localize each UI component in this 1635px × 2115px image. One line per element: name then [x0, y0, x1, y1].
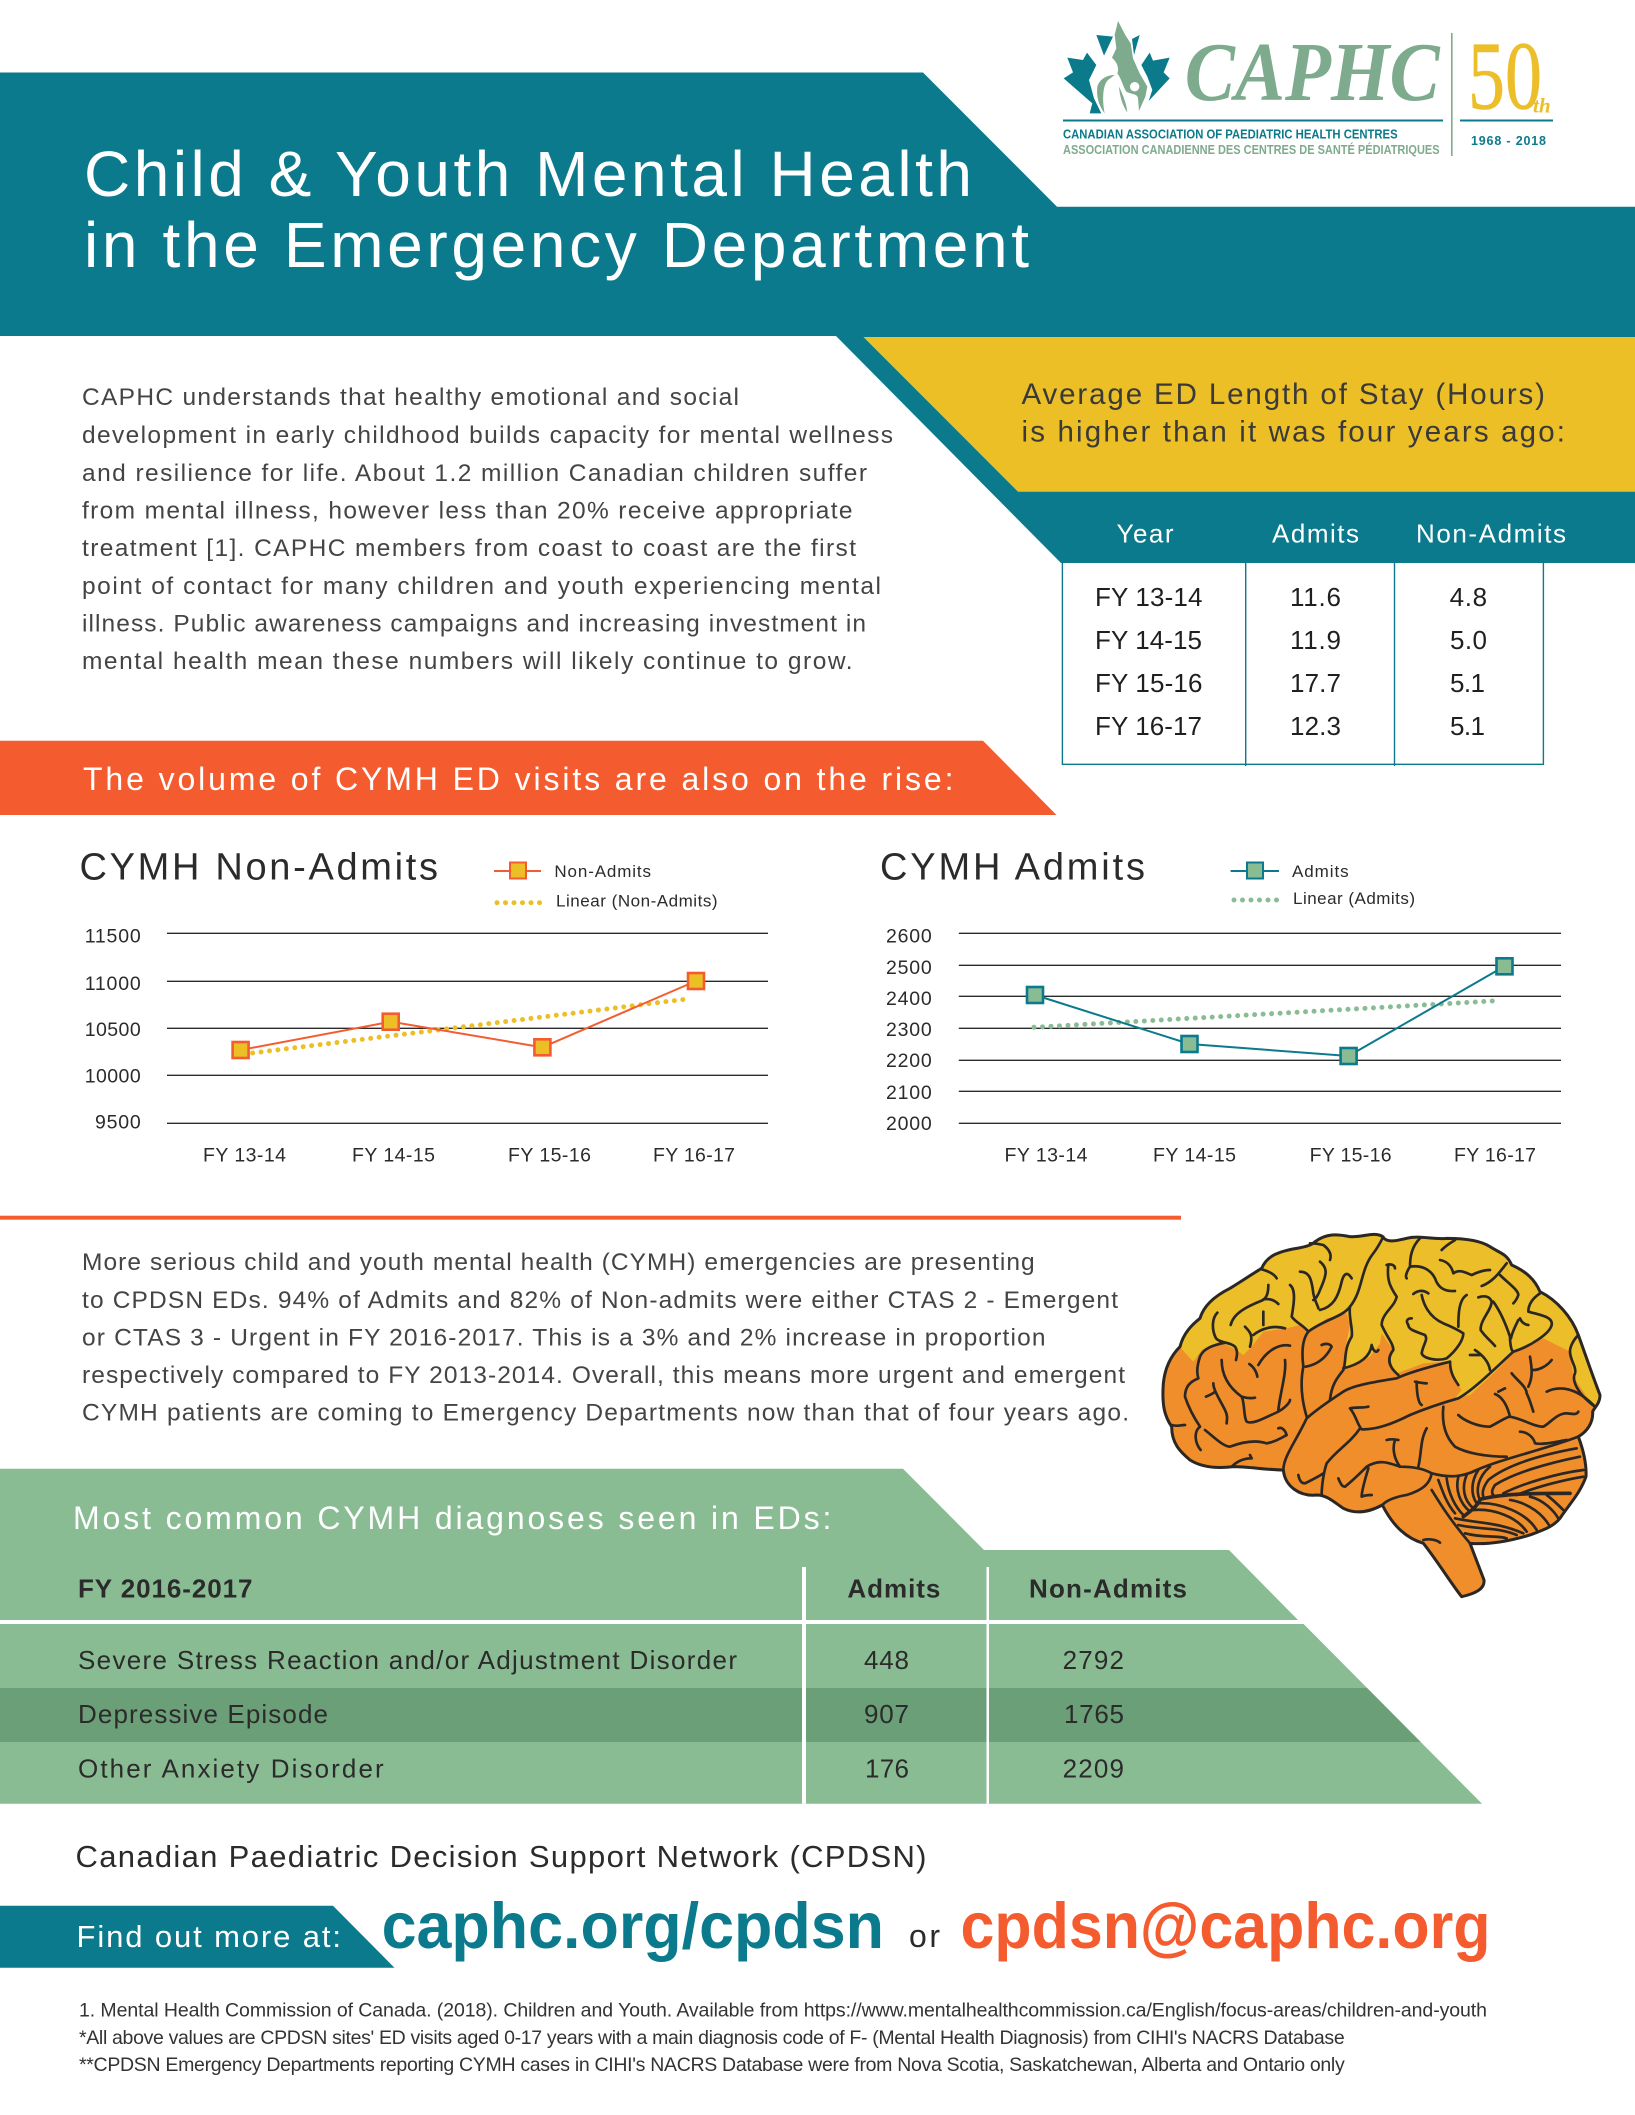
row: other anxiety: Other Anxiety Disorder	[78, 1754, 384, 1784]
panel: most common diagnoses	[0, 1469, 1482, 1804]
y axis labels: 10500	[85, 1019, 141, 1041]
icon: maple leaf with figures	[1064, 21, 1170, 113]
y axis labels: 2100	[886, 1082, 932, 1104]
x axis labels: FY 16-17	[653, 1145, 735, 1167]
title: Child & Youth Mental Health	[84, 138, 972, 210]
logo: CAPHC 50th: th	[1533, 94, 1551, 118]
table body: 11.9	[1290, 625, 1341, 655]
paragraph: serious emergencies: CYMH patients are coming to Emergency Departments now than that of four years ago.	[82, 1400, 1129, 1426]
table header	[1116, 519, 1566, 549]
chart: CYMH Admits	[880, 846, 1561, 1167]
legend: Non-Admits	[554, 862, 651, 881]
row: severe stress: 448	[864, 1645, 909, 1675]
trend line	[253, 999, 685, 1053]
table body: 5.1	[1450, 711, 1485, 741]
table header: FY 2016-2017	[78, 1574, 252, 1604]
intro paragraph: from mental illness, however less than 20% receive appropriate	[82, 498, 853, 524]
x axis labels: FY 14-15	[352, 1145, 435, 1167]
y axis labels: 2600	[886, 926, 932, 948]
table header: Year	[1116, 519, 1174, 549]
table body: 4.8	[1450, 582, 1487, 612]
x axis labels	[1004, 1145, 1536, 1167]
x axis labels: FY 13-14	[203, 1145, 286, 1167]
legend: Admits	[1292, 862, 1349, 881]
wordmark: CAPHC	[1185, 26, 1441, 119]
table body: 12.3	[1290, 711, 1341, 741]
title: in the Emergency Department	[84, 209, 1029, 281]
y axis labels: 11000	[85, 973, 141, 995]
50th: 50	[1468, 22, 1542, 130]
footnotes	[79, 2000, 1487, 2076]
footnotes: **CPDSN Emergency Departments reporting CYMH cases in CIHI's NACRS Database were from Nova Scotia, Saskatchewan, Alberta and Ontario only	[79, 2054, 1345, 2076]
chart: CYMH Non-Admits	[80, 846, 768, 1167]
intro paragraph: point of contact for many children and youth experiencing mental	[82, 573, 881, 600]
x axis labels: FY 14-15	[1153, 1145, 1236, 1167]
table header: Admits	[1272, 519, 1359, 549]
chart title: CYMH Non-Admits	[80, 846, 438, 888]
orange banner: volume rising: The volume of CYMH ED visits are also on the rise:	[83, 761, 954, 797]
paragraph: serious emergencies	[82, 1249, 1129, 1426]
row: other anxiety	[78, 1754, 1124, 1784]
x axis labels: FY 15-16	[508, 1145, 591, 1167]
intro paragraph: and resilience for life. About 1.2 million Canadian children suffer	[82, 460, 867, 487]
row: depressive episode: 1765	[1064, 1699, 1124, 1729]
y axis labels: 9500	[95, 1112, 141, 1134]
logo: CAPHC 50th	[1063, 21, 1553, 157]
icon: brain	[1163, 1223, 1613, 1597]
intro paragraph: illness. Public awareness campaigns and increasing investment in	[82, 611, 866, 638]
paragraph: serious emergencies: to CPDSN EDs. 94% of Admits and 82% of Non-admits were either CTAS 2 - Emergent	[82, 1287, 1118, 1314]
row: depressive episode	[78, 1699, 1124, 1729]
data series	[233, 973, 704, 1058]
paragraph: serious emergencies: or CTAS 3 - Urgent in FY 2016-2017. This is a 3% and 2% increase in proportion	[82, 1324, 1046, 1352]
table body: 5.1	[1450, 668, 1485, 698]
find out more flag	[0, 1906, 394, 1968]
table body: 17.7	[1290, 668, 1341, 698]
legend	[494, 862, 718, 911]
intro paragraph: CAPHC understands that healthy emotional and social	[82, 384, 739, 411]
legend	[1231, 862, 1415, 908]
table body: FY 15-16	[1095, 668, 1202, 698]
legend: Linear (Admits)	[1293, 889, 1415, 908]
English name: CANADIAN ASSOCIATION OF PAEDIATRIC HEALTH CENTRES	[1063, 126, 1398, 141]
network name: Canadian Paediatric Decision Support Network (CPDSN)	[76, 1839, 926, 1874]
panel: average ED length of stay	[836, 336, 1635, 766]
row: other anxiety: 2209	[1063, 1754, 1124, 1784]
table header: Non-Admits	[1416, 519, 1566, 549]
row: other anxiety: 176	[865, 1754, 909, 1784]
header banner	[0, 72, 1635, 336]
text: or: or	[909, 1918, 940, 1954]
table body: 11.6	[1290, 582, 1341, 612]
y axis labels: 2200	[886, 1050, 932, 1072]
table body: FY 14-15	[1095, 625, 1202, 655]
intro paragraph	[82, 384, 893, 675]
data series	[1027, 958, 1512, 1064]
years: 1968 - 2018	[1471, 134, 1546, 148]
panel heading: Average ED Length of Stay (Hours)	[1022, 378, 1545, 411]
intro paragraph: development in early childhood builds capacity for mental wellness	[82, 422, 893, 449]
y axis labels: 2000	[886, 1113, 932, 1135]
y axis labels	[85, 926, 141, 1134]
table header: Non-Admits	[1029, 1574, 1187, 1604]
footnotes: *All above values are CPDSN sites' ED visits aged 0-17 years with a main diagnosis code of F- (Mental Health Diagnosis) from CIHI's NACRS Database	[79, 2027, 1345, 2049]
panel heading	[1022, 378, 1565, 449]
French name: ASSOCIATION CANADIENNE DES CENTRES DE SANTÉ PÉDIATRIQUES	[1063, 142, 1440, 157]
table body	[1062, 563, 1543, 766]
y axis labels: 11500	[85, 926, 141, 948]
paragraph: serious emergencies: respectively compared to FY 2013-2014. Overall, this means more urgent and emergent	[82, 1362, 1125, 1389]
find out more flag: Find out more at:	[76, 1919, 341, 1954]
row: depressive episode: Depressive Episode	[78, 1699, 328, 1729]
table body: FY 13-14	[1095, 582, 1202, 612]
paragraph: serious emergencies: More serious child and youth mental health (CYMH) emergencies are presenting	[82, 1249, 1035, 1276]
x axis labels: FY 13-14	[1004, 1145, 1088, 1167]
row: severe stress: Severe Stress Reaction and/or Adjustment Disorder	[78, 1645, 737, 1675]
intro paragraph: treatment [1]. CAPHC members from coast to coast are the first	[82, 535, 856, 562]
y axis labels: 2300	[886, 1019, 932, 1041]
x axis labels	[203, 1145, 735, 1167]
y axis labels: 10000	[85, 1066, 141, 1088]
y axis labels: 2400	[886, 988, 932, 1010]
row: severe stress: 2792	[1063, 1645, 1124, 1675]
chart title: CYMH Admits	[880, 846, 1145, 888]
table body: 5.0	[1450, 625, 1487, 655]
row: depressive episode: 907	[864, 1699, 909, 1729]
table body: FY 16-17	[1095, 711, 1202, 741]
orange banner: volume rising	[0, 741, 1056, 815]
legend: Linear (Non-Admits)	[556, 892, 718, 911]
y axis labels: 2500	[886, 957, 932, 979]
row: severe stress	[78, 1645, 1124, 1675]
title	[84, 138, 1029, 281]
table header	[78, 1574, 1187, 1604]
intro paragraph: mental health mean these numbers will likely continue to grow.	[82, 648, 852, 675]
x axis labels: FY 16-17	[1454, 1145, 1536, 1167]
footnotes: 1. Mental Health Commission of Canada. (2018). Children and Youth. Available from https://www.mentalhealthcommission.ca/English/focus-areas/children-and-youth	[79, 2000, 1487, 2022]
x axis labels: FY 15-16	[1310, 1145, 1392, 1167]
table header: Admits	[847, 1574, 940, 1604]
trend line	[1034, 1001, 1493, 1027]
panel heading: is higher than it was four years ago:	[1022, 416, 1565, 449]
link: website: caphc.org/cpdsn	[382, 1889, 884, 1962]
link: email: cpdsn@caphc.org	[960, 1889, 1490, 1962]
y axis labels	[886, 926, 932, 1135]
panel heading: Most common CYMH diagnoses seen in EDs:	[73, 1500, 831, 1536]
